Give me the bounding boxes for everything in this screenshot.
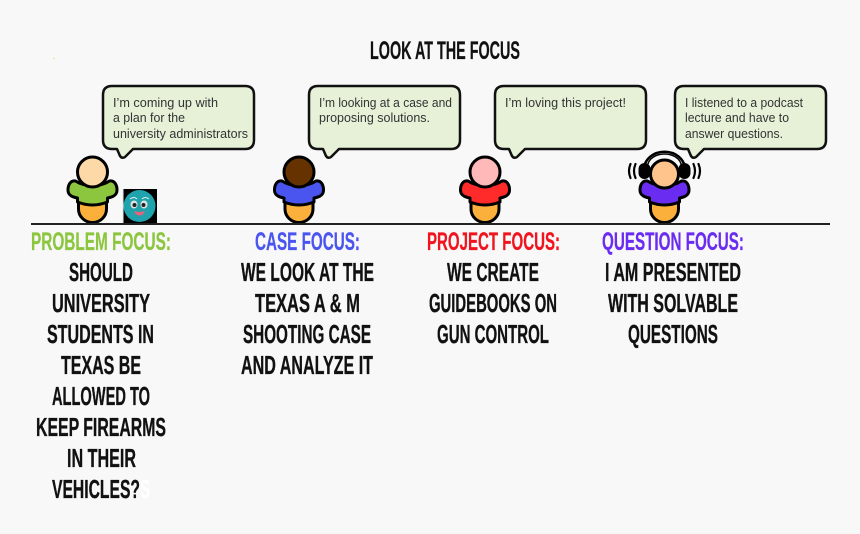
- speech bubble: project focus: I’m loving this project!: [505, 96, 626, 110]
- figure: question student with headphones: [629, 152, 700, 222]
- column: problem focus: TEXAS BE: [61, 350, 141, 380]
- speech bubble: case focus: proposing solutions.: [319, 111, 430, 125]
- column: case focus: TEXAS A & M: [255, 288, 360, 318]
- figure: problem student: [68, 157, 117, 222]
- speech bubble: question focus: lecture and have to: [685, 111, 789, 125]
- column: case focus: CASE FOCUS:: [255, 228, 360, 256]
- title: LOOK AT THE FOCUS: [370, 37, 520, 65]
- column: project focus: WE CREATE: [447, 257, 539, 287]
- speech bubble: problem focus: I’m coming up with: [113, 96, 218, 110]
- column: question focus: QUESTIONS: [628, 319, 718, 349]
- column: project focus: PROJECT FOCUS:: [427, 228, 560, 256]
- figure: case student: [274, 157, 324, 222]
- column: question focus: I AM PRESENTED: [605, 257, 741, 287]
- speech bubble: question focus: answer questions.: [685, 127, 783, 141]
- column: problem focus: [31, 228, 171, 504]
- column: case focus: [241, 228, 374, 380]
- column: case focus: AND ANALYZE IT: [241, 350, 373, 380]
- speech bubble: problem focus: a plan for the: [113, 111, 185, 125]
- speech bubble: question focus: I listened to a podcast: [685, 96, 804, 110]
- column: problem focus: IN THEIR: [67, 443, 136, 473]
- icon: teal smiley: [122, 189, 157, 224]
- column: problem focus: PROBLEM FOCUS:: [31, 228, 171, 256]
- speech bubble: question focus: [675, 86, 826, 158]
- column: question focus: QUESTION FOCUS:: [602, 228, 744, 256]
- speech bubble: problem focus: university administrators: [113, 127, 248, 141]
- speech bubble: problem focus: [103, 86, 254, 158]
- column: problem focus: UNIVERSITY: [52, 288, 150, 318]
- column: problem focus: S: [140, 474, 150, 504]
- speech bubble: case focus: [309, 86, 460, 158]
- column: project focus: [427, 228, 560, 349]
- column: question focus: WITH SOLVABLE: [608, 288, 738, 318]
- speech bubble: project focus: [495, 86, 646, 158]
- column: question focus: [602, 228, 744, 349]
- column: problem focus: KEEP FIREARMS: [36, 412, 166, 442]
- figure: project student: [460, 157, 510, 222]
- column: problem focus: VEHICLES?: [52, 474, 140, 504]
- speech bubble: case focus: I’m looking at a case and: [319, 96, 452, 110]
- ground line: [31, 223, 830, 225]
- column: case focus: WE LOOK AT THE: [241, 257, 374, 287]
- column: problem focus: SHOULD: [69, 257, 133, 287]
- column: problem focus: STUDENTS IN: [47, 319, 154, 349]
- column: project focus: GUN CONTROL: [437, 319, 549, 349]
- column: project focus: GUIDEBOOKS ON: [429, 288, 557, 318]
- column: case focus: SHOOTING CASE: [243, 319, 371, 349]
- column: problem focus: ALLOWED TO: [52, 381, 150, 411]
